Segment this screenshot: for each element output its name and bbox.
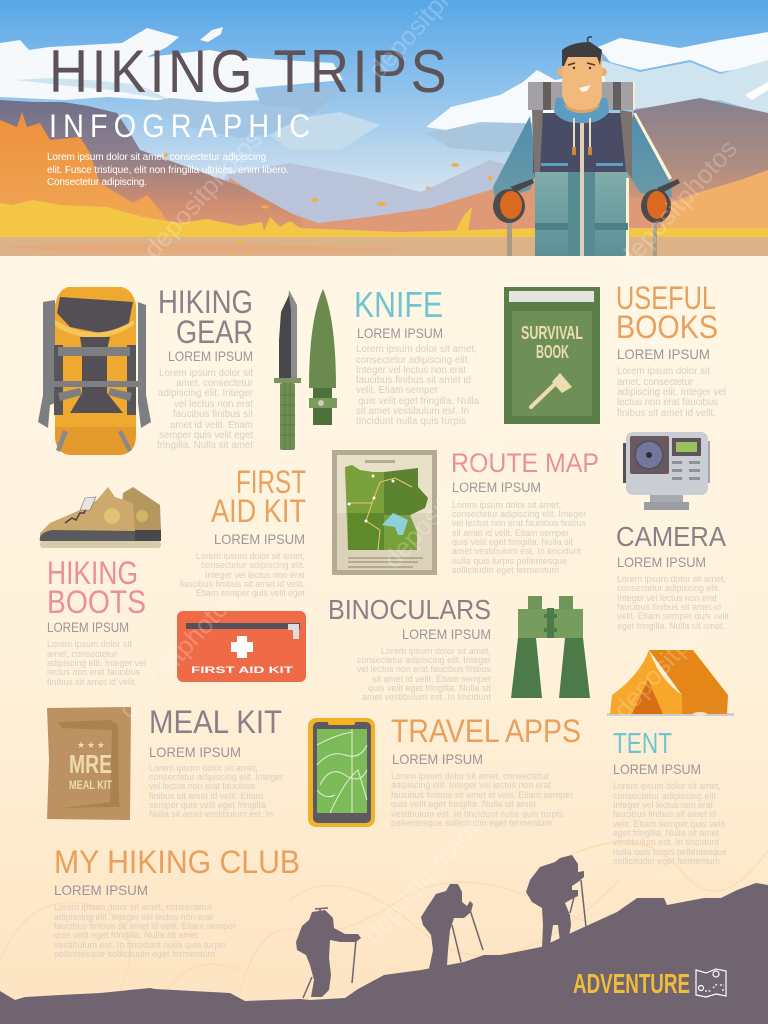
- subheading: LOREM IPSUM: [452, 479, 541, 495]
- body text: amet vestibulum est. In tincidunt: [362, 692, 492, 702]
- body text: Lorem ipsum dolor sit: [47, 639, 133, 649]
- body text: quis velit eget fringilla. Nulla sit amet: [391, 799, 537, 809]
- body text: vel lectus non erat faucibus: [149, 781, 256, 791]
- body text: [180, 551, 306, 598]
- page background: [0, 256, 768, 1024]
- body text: Etiam semper quis velit eget: [196, 588, 306, 598]
- panel: hiking boots: [40, 487, 161, 687]
- body text: pellentesque sollicitudin eget fermentum: [391, 818, 552, 828]
- heading: BOOKS: [616, 309, 718, 345]
- body text: Lorem ipsum dolor sit amet,: [452, 500, 561, 510]
- body text: sit amet id velit. Etiam semper: [372, 674, 491, 684]
- panel: tent: [607, 650, 734, 866]
- body text: adipiscing elit. Integer: [158, 388, 254, 399]
- panel: first aid kit: [177, 464, 306, 682]
- body text: amet, consectetur: [176, 378, 254, 389]
- panel: travel apps: [308, 713, 581, 828]
- body text: finibus sit amet id velit.: [617, 408, 716, 419]
- title: HIKING TRIPS: [49, 38, 450, 106]
- heading: KNIFE: [354, 284, 443, 325]
- body text: lectus non erat faucibus: [47, 667, 141, 677]
- body text: velit. Etiam semper quis velit: [613, 819, 726, 829]
- subheading: LOREM IPSUM: [392, 751, 483, 767]
- icon: action camera: [623, 432, 710, 510]
- body text: [452, 500, 587, 575]
- body text: amet id velit. Etiam: [170, 420, 253, 431]
- icon: survival book: BOOK: [536, 342, 569, 362]
- body text: consectetur adipiscing elit. Integer: [357, 655, 491, 665]
- subheading: LOREM IPSUM: [149, 744, 241, 760]
- body text: sit amet id velit. Etiam semper: [452, 528, 569, 538]
- icon: backpack: [38, 287, 151, 455]
- body text: Integer vel lectus non erat: [205, 570, 306, 580]
- body text: Lorem ipsum dolor sit amet,: [617, 574, 726, 584]
- heading: MEAL KIT: [149, 704, 282, 740]
- panel: camera: [616, 432, 730, 631]
- subtitle: INFOGRAPHIC: [49, 109, 316, 144]
- body text: sit amet vestibulum est. In: [356, 406, 469, 417]
- subheading: LOREM IPSUM: [214, 531, 305, 547]
- body text: nulla quis turpis pellentesque: [613, 847, 727, 857]
- body text: vestibulum est. In tincidunt: [613, 837, 720, 847]
- mountain ridge silhouette with hikers: [0, 855, 768, 1024]
- watermarks: depositphotos: [357, 809, 488, 949]
- heading: USEFUL: [616, 280, 716, 316]
- icon: survival book: [504, 287, 600, 424]
- icon: boots: [40, 487, 161, 548]
- body text: consectetur adipiscing elit.: [356, 355, 470, 366]
- body text: Lorem ipsum dolor sit amet, consectetur: [54, 902, 212, 912]
- subheading: LOREM IPSUM: [357, 325, 443, 341]
- heading: [211, 464, 306, 529]
- icon: first aid kit box: [177, 611, 306, 682]
- watermarks: depositphotos: [112, 584, 243, 724]
- body text: Lorem ipsum dolor sit amet,: [149, 763, 258, 773]
- hero intro text: [47, 152, 289, 188]
- body text: consectetur adipiscing elit.: [201, 560, 305, 570]
- body text: vel lectus non erat: [174, 399, 253, 410]
- body text: adipiscing elit. Integer vel lectus non erat: [391, 780, 552, 790]
- body text: eget fringilla. Nulla sit amet: [613, 828, 720, 838]
- icon: treasure map: [696, 969, 726, 997]
- body text: lectus non erat faucibus: [617, 397, 718, 408]
- icon: folded map: [332, 450, 437, 575]
- body text: [357, 646, 492, 702]
- body text: faucibus finibus sit amet id velit. Etiam semper: [391, 790, 573, 800]
- hero intro text: Lorem ipsum dolor sit amet, consectetur adipiscing: [47, 152, 266, 163]
- watermarks: [112, 0, 743, 949]
- icon: survival book: SURVIVAL: [521, 323, 583, 343]
- body text: vel lectus non erat faucibus finibus: [357, 664, 492, 674]
- body text: quis velit eget fringilla. Nulla: [358, 396, 480, 407]
- watermarks: depositphotos: [377, 434, 508, 574]
- icon: MRE pouch: MRE: [69, 749, 112, 779]
- subheading: LOREM IPSUM: [168, 348, 253, 364]
- heading: [47, 555, 146, 620]
- heading: [616, 280, 718, 345]
- body text: Integer vel lectus non erat: [617, 593, 718, 603]
- heading: [158, 284, 253, 350]
- body text: sollicitudin eget fermentum: [613, 856, 720, 866]
- body text: amet vestibulum est. In tincidunt: [452, 546, 582, 556]
- body text: [157, 368, 254, 451]
- body text: faucibus finibus sit amet id velit.: [180, 579, 305, 589]
- icon: tent: [607, 650, 734, 716]
- body text: consectetur adipiscing elit.: [617, 583, 720, 593]
- body text: semper quis velit eget: [159, 430, 253, 441]
- heading: ROUTE MAP: [451, 448, 599, 478]
- body text: Lorem ipsum dolor sit amet,: [196, 551, 305, 561]
- icon: knife and sheath: [274, 289, 337, 450]
- body text: eget fringilla. Nulla sit amet.: [617, 621, 725, 631]
- panel: my hiking club: [54, 844, 300, 959]
- body text: fringilla. Nulla sit amet: [157, 440, 253, 451]
- body text: faucibus finibus sit amet id velit. Etiam semper: [54, 921, 236, 931]
- watermarks: depositphotos: [612, 134, 743, 274]
- panel: binoculars: [328, 594, 590, 702]
- subheading: LOREM IPSUM: [617, 346, 710, 362]
- hiker character: [493, 37, 680, 256]
- watermarks: depositphotos: [607, 584, 738, 724]
- body text: vestibulum est. In tincidunt nulla quis turpis: [54, 940, 227, 950]
- body text: semper quis velit eget fringilla.: [149, 800, 268, 810]
- body text: Integer vel lectus non erat: [356, 365, 466, 376]
- body text: Lorem ipsum dolor sit amet,: [613, 781, 721, 791]
- body text: Lorem ipsum dolor sit: [159, 368, 253, 379]
- body text: faucibus finibus sit amet id: [617, 602, 721, 612]
- hero panel: mountain landscape: [0, 0, 768, 256]
- body text: vel lectus non erat faucibus finibus: [452, 518, 587, 528]
- body text: nulla quis turpis pellentesque: [452, 556, 567, 566]
- panel: meal kit: [47, 704, 283, 820]
- heading: MY HIKING CLUB: [54, 844, 300, 880]
- icon: binoculars: [511, 596, 590, 698]
- subheading: LOREM IPSUM: [617, 554, 706, 570]
- icon: first aid kit box: FIRST AID KIT: [191, 665, 293, 676]
- body text: Nulla sit amet vestibulum est. In: [149, 809, 273, 819]
- topographic contour lines: [0, 842, 768, 1000]
- body text: [356, 344, 480, 427]
- heading: HIKING: [47, 555, 138, 591]
- body text: consectetur adipiscing elit. Integer: [452, 509, 586, 519]
- hiker silhouette 2: [421, 884, 483, 969]
- body text: quis velit eget fringilla. Nulla sit: [368, 683, 492, 693]
- body text: [54, 902, 236, 959]
- heading: BINOCULARS: [328, 594, 491, 625]
- hiker silhouette 1: [296, 908, 361, 998]
- body text: quis velit eget fringilla. Nulla sit: [452, 537, 574, 547]
- body text: Lorem ipsum dolor sit amet,: [356, 344, 477, 355]
- body text: faucibus finibus sit: [173, 409, 253, 420]
- heading: GEAR: [176, 314, 253, 350]
- body text: adipiscing elit. Integer vel lectus non erat: [54, 912, 214, 922]
- body text: amet, consectetur: [47, 649, 117, 659]
- body text: pellentesque sollicitudin eget fermentum: [54, 949, 215, 959]
- body text: amet, consectetur: [617, 377, 694, 388]
- body text: [149, 763, 283, 819]
- hiker silhouette 3: [526, 855, 586, 948]
- panel: knife: [274, 284, 480, 450]
- heading: TENT: [613, 728, 672, 760]
- body text: Integer vel lectus non erat: [613, 800, 714, 810]
- adventure label: ADVENTURE: [573, 968, 690, 999]
- body text: consectetur adipiscing elit. Integer: [149, 772, 283, 782]
- subheading: LOREM IPSUM: [402, 626, 491, 642]
- subheading: LOREM IPSUM: [54, 882, 148, 898]
- heading: BOOTS: [47, 584, 146, 620]
- body text: sollicitudin eget fermentum: [452, 565, 559, 575]
- body text: consectetur adipiscing elit: [613, 791, 717, 801]
- body text: quis velit eget fringilla. Nulla sit amet: [54, 930, 199, 940]
- watermarks: depositphotos: [137, 124, 268, 264]
- body text: [47, 639, 146, 687]
- heading: HIKING: [158, 284, 253, 320]
- body text: finibus sit amet id velit. Etiam: [149, 791, 263, 801]
- body text: Lorem ipsum dolor sit amet, consectetur: [391, 771, 549, 781]
- body text: [391, 771, 573, 828]
- heading: CAMERA: [616, 521, 726, 552]
- panel: useful books: [504, 280, 726, 424]
- body text: faucibus finibus sit amet id: [613, 809, 716, 819]
- subheading: LOREM IPSUM: [613, 761, 701, 777]
- hero intro text: Consectetur adipiscing.: [47, 177, 147, 188]
- icon: GPS phone: [308, 718, 375, 827]
- body text: adipiscing elit. Integer vel: [47, 658, 146, 668]
- panel: route map: [332, 448, 599, 575]
- subheading: LOREM IPSUM: [47, 619, 129, 635]
- body text: velit. Etiam semper quis velit: [617, 611, 730, 621]
- body text: faucibus finibus sit amet id: [356, 375, 471, 386]
- body text: finibus sit amet id velit.: [47, 677, 137, 687]
- body text: vestibulum est. In tincidunt nulla quis turpis: [391, 809, 564, 819]
- body text: [613, 781, 727, 866]
- body text: adipiscing elit. Integer vel: [617, 387, 726, 398]
- icon: MRE pouch: [47, 707, 131, 820]
- body text: Lorem ipsum dolor sit: [617, 366, 710, 377]
- icon: MRE pouch: ★★★: [77, 740, 105, 750]
- body text: Lorem ipsum dolor sit amet,: [381, 646, 491, 656]
- body text: [617, 574, 730, 631]
- heading: AID KIT: [211, 493, 306, 529]
- heading: TRAVEL APPS: [391, 713, 581, 749]
- heading: FIRST: [236, 464, 306, 500]
- panel: hiking gear: [38, 284, 254, 455]
- body text: tincidunt nulla quis turpis: [356, 416, 466, 427]
- hero intro text: elit. Fusce tristique, elit non fringilla ultrices, enim libero.: [47, 165, 289, 176]
- body text: velit. Etiam semper: [356, 385, 439, 396]
- icon: MRE pouch: MEAL KIT: [69, 778, 113, 792]
- body text: [617, 366, 726, 419]
